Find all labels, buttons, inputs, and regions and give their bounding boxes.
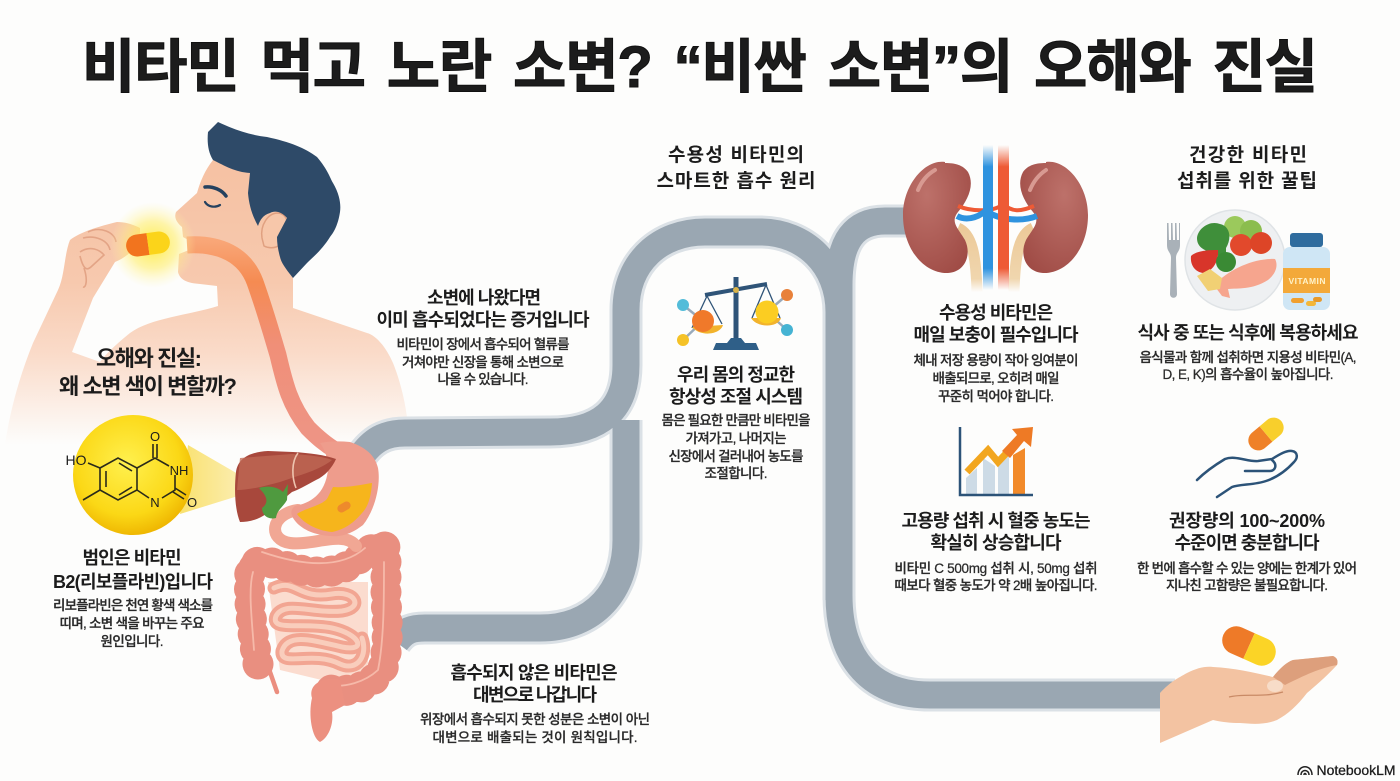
text block: take with meal bbox=[1138, 323, 1358, 382]
heading: smart absorption: 스마트한 흡수 원리 bbox=[656, 170, 816, 192]
capsule in fingers bbox=[125, 230, 171, 258]
body silhouette bbox=[5, 160, 408, 445]
text block: culprit is vitamin B2 bbox=[53, 548, 213, 649]
text block: daily supply: 체내 저장 용량이 작아 잉여분이 bbox=[914, 353, 1078, 368]
text block: daily supply: 수용성 비타민은 bbox=[939, 303, 1053, 323]
heading: myth and truth bbox=[59, 346, 237, 399]
text block: daily supply: 매일 보충이 필수입니다 bbox=[914, 325, 1079, 345]
text block: homeostasis: 조절합니다. bbox=[704, 466, 768, 481]
small intestine bbox=[268, 582, 368, 682]
renal vein bbox=[957, 208, 1037, 219]
logo: NotebookLM: NotebookLM bbox=[1316, 762, 1396, 778]
icon: rising chart bbox=[960, 427, 1033, 495]
spotlight beam from liver to molecule bbox=[180, 445, 238, 514]
text block: high dose bbox=[894, 511, 1098, 593]
text block: daily supply: 꾸준히 먹어야 합니다. bbox=[938, 389, 1054, 404]
heading: myth and truth: 왜 소변 색이 변할까? bbox=[59, 374, 237, 399]
finger creases bbox=[80, 230, 116, 287]
heading: myth and truth: 오해와 진실: bbox=[96, 346, 202, 371]
small pill in stomach bbox=[336, 500, 352, 514]
text block: homeostasis: 신장에서 걸러내어 농도를 bbox=[668, 449, 804, 464]
text block: high dose: 확실히 상승합니다 bbox=[930, 533, 1062, 553]
text block: recommended dose: 권장량의 100~200% bbox=[1169, 511, 1325, 531]
rectum bbox=[310, 679, 345, 742]
icon: outlined hand with capsule bbox=[1197, 413, 1297, 497]
riboflavin molecule icon: O bbox=[150, 429, 160, 444]
heading: smart absorption bbox=[656, 144, 816, 192]
vena cava bbox=[983, 145, 993, 290]
icon: food plate bbox=[1185, 210, 1285, 310]
riboflavin molecule icon: O bbox=[187, 495, 197, 510]
icon: open hand with capsule bbox=[1160, 622, 1338, 743]
closed eye bbox=[205, 202, 220, 207]
text block: culprit is vitamin B2: 리보플라빈은 천연 황색 색소를 bbox=[53, 598, 213, 613]
connecting grey pathway bbox=[360, 221, 1175, 695]
text block: high dose: 고용량 섭취 시 혈중 농도는 bbox=[902, 511, 1090, 531]
text block: unabsorbed vitamins: 흡수되지 않은 비타민은 bbox=[450, 663, 618, 683]
ear bbox=[262, 213, 288, 248]
illustration: man swallowing a capsule bbox=[80, 122, 340, 450]
large intestine bbox=[249, 546, 387, 691]
text block: unabsorbed vitamins bbox=[420, 663, 650, 745]
text block: culprit is vitamin B2: 띠며, 소변 색을 바꾸는 주요 bbox=[60, 616, 204, 631]
icon: kidneys bbox=[903, 145, 1088, 292]
text block: recommended dose bbox=[1137, 511, 1357, 593]
text block: unabsorbed vitamins: 대변으로 배출되는 것이 원칙입니다. bbox=[432, 730, 638, 745]
left kidney bbox=[903, 162, 971, 273]
kidney highlights bbox=[918, 170, 1046, 190]
text block: absorbed evidence bbox=[376, 288, 590, 387]
renal artery bbox=[958, 204, 1034, 210]
text block: homeostasis bbox=[662, 365, 810, 481]
duodenum bbox=[275, 510, 356, 546]
text block: absorbed evidence: 이미 흡수되었다는 증거입니다 bbox=[376, 310, 590, 330]
heading: healthy tips: 섭취를 위한 꿀팁 bbox=[1177, 170, 1317, 192]
capsule glow bbox=[110, 202, 196, 288]
text block: recommended dose: 수준이면 충분합니다 bbox=[1174, 533, 1320, 553]
text block: homeostasis: 항상성 조절 시스템 bbox=[669, 387, 803, 407]
text block: recommended dose: 한 번에 흡수할 수 있는 양에는 한계가 있어 bbox=[1137, 560, 1357, 576]
esophagus bbox=[187, 245, 335, 450]
text block: daily supply: 배출되므로, 오히려 매일 bbox=[932, 371, 1060, 386]
text block: homeostasis: 몸은 필요한 만큼만 비타민을 bbox=[662, 413, 810, 428]
text block: high dose: 비타민 C 500mg 섭취 시, 50mg 섭취 bbox=[894, 561, 1098, 576]
illustration: digestive organs bbox=[235, 441, 387, 742]
text block: high dose: 때보다 혈중 농도가 약 2배 높아집니다. bbox=[894, 577, 1098, 593]
hair bbox=[208, 122, 340, 278]
icon: fork bbox=[1167, 223, 1180, 298]
riboflavin molecule icon: NH bbox=[170, 463, 188, 478]
text block: culprit is vitamin B2: 원인입니다. bbox=[100, 634, 164, 649]
text block: daily supply bbox=[914, 303, 1079, 404]
liver bbox=[235, 451, 336, 522]
text block: absorbed evidence: 거쳐야만 신장을 통해 소변으로 bbox=[402, 355, 564, 370]
text block: take with meal: 식사 중 또는 식후에 복용하세요 bbox=[1138, 323, 1358, 343]
text block: recommended dose: 지나친 고함량은 불필요합니다. bbox=[1166, 578, 1328, 593]
text block: homeostasis: 우리 몸의 정교한 bbox=[677, 365, 795, 385]
text block: culprit is vitamin B2: 범인은 비타민 bbox=[82, 548, 182, 568]
aorta bbox=[998, 145, 1009, 290]
icon: vitamin bottle: VITAMIN bbox=[1288, 276, 1326, 286]
text block: absorbed evidence: 비타민이 장에서 흡수되어 혈류를 bbox=[396, 336, 570, 352]
heading: smart absorption: 수용성 비타민의 bbox=[668, 144, 804, 166]
text block: absorbed evidence: 나올 수 있습니다. bbox=[438, 372, 528, 387]
icon: balance scale with molecules bbox=[677, 277, 793, 350]
right kidney bbox=[1020, 162, 1088, 273]
heading: healthy tips bbox=[1177, 144, 1317, 192]
heading: healthy tips: 건강한 비타민 bbox=[1189, 144, 1307, 166]
riboflavin molecule icon: N bbox=[150, 495, 160, 510]
appendix bbox=[270, 672, 277, 692]
text block: take with meal: 음식물과 함께 섭취하면 지용성 비타민(A, bbox=[1140, 350, 1356, 365]
text block: unabsorbed vitamins: 위장에서 흡수되지 못한 성분은 소변이 아닌 bbox=[420, 711, 650, 727]
stomach contents bbox=[297, 483, 372, 532]
stomach bbox=[291, 441, 379, 536]
ureters bbox=[958, 228, 1033, 292]
title: 비타민 먹고 노란 소변? “비싼 소변”의 오해와 진실 bbox=[82, 35, 1318, 100]
text block: culprit is vitamin B2: B2(리보플라빈)입니다 bbox=[53, 572, 213, 592]
riboflavin molecule icon bbox=[66, 415, 197, 535]
riboflavin molecule icon: HO bbox=[66, 452, 87, 468]
text block: unabsorbed vitamins: 대변으로 나갑니다 bbox=[473, 685, 597, 705]
text block: homeostasis: 가져가고, 나머지는 bbox=[686, 431, 786, 446]
gallbladder bbox=[259, 484, 288, 518]
text block: absorbed evidence: 소변에 나왔다면 bbox=[427, 288, 541, 308]
eyebrow bbox=[205, 187, 226, 196]
text block: take with meal: D, E, K)의 흡수율이 높아집니다. bbox=[1162, 366, 1334, 382]
icon: vitamin bottle bbox=[1283, 233, 1330, 310]
